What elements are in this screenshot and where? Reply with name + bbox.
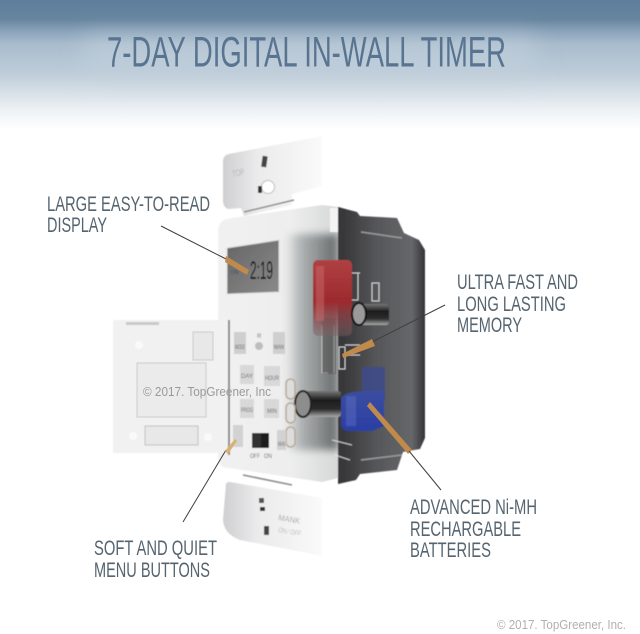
lower mounting plate: ON ⁄ OFF xyxy=(278,527,302,538)
label: menu buttons xyxy=(94,537,217,582)
label: display: DISPLAY xyxy=(47,214,107,237)
control buttons: PROG xyxy=(241,408,253,414)
label: memory: LONG LASTING xyxy=(457,293,566,316)
control buttons: DAY xyxy=(241,374,253,380)
control buttons: MODE xyxy=(235,345,245,351)
LCD display: ON xyxy=(231,270,239,276)
top mounting plate xyxy=(223,136,322,216)
label: menu buttons: MENU BUTTONS xyxy=(94,559,210,582)
top edge highlight xyxy=(330,208,338,232)
control buttons: HOUR xyxy=(265,376,280,382)
control buttons: MAN xyxy=(278,442,285,448)
label: display: LARGE EASY-TO-READ xyxy=(47,193,210,216)
control buttons xyxy=(233,332,286,450)
top mounting plate: TOP xyxy=(231,167,245,179)
callout arrow: memory xyxy=(342,305,445,358)
LCD display: 2:19 xyxy=(250,257,273,285)
body right edge mask xyxy=(338,207,345,484)
label: batteries: BATTERIES xyxy=(410,539,491,562)
label: display xyxy=(47,193,210,237)
housing highlights xyxy=(361,232,402,460)
label: memory: MEMORY xyxy=(457,314,522,337)
label: menu buttons: SOFT AND QUIET xyxy=(94,537,217,560)
callout arrow: batteries xyxy=(367,402,441,490)
circuit board strip xyxy=(322,318,336,374)
header gradient band xyxy=(0,0,640,130)
copyright: © 2017. TopGreener, Inc. xyxy=(497,618,626,632)
translucent switch body xyxy=(218,205,338,482)
slide switch xyxy=(250,433,272,460)
control buttons: MAN xyxy=(274,345,284,351)
upper black cylinder xyxy=(352,303,389,325)
watermark on device: © 2017. TopGreener, Inc xyxy=(143,385,271,399)
label: memory xyxy=(457,271,578,337)
control buttons: MIN xyxy=(267,409,277,415)
callout arrow: display xyxy=(161,226,249,275)
label: batteries xyxy=(410,496,537,562)
LCD display xyxy=(227,240,279,294)
label: batteries: ADVANCED Ni-MH xyxy=(410,496,537,519)
slide switch: OFF xyxy=(250,453,260,460)
lower mounting plate xyxy=(223,475,322,556)
side ovals xyxy=(286,379,295,447)
lower black cylinder xyxy=(295,391,341,417)
slide switch: ON xyxy=(264,453,272,460)
callout arrow: menu buttons xyxy=(183,439,237,522)
inner shading of body xyxy=(284,234,338,450)
open front cover xyxy=(113,320,230,455)
label: memory: ULTRA FAST AND xyxy=(457,271,578,294)
control buttons: R xyxy=(257,334,262,340)
back housing xyxy=(338,207,425,484)
red capacitor xyxy=(313,260,352,336)
label: batteries: RECHARGABLE xyxy=(410,518,521,541)
lower mounting plate: MANK xyxy=(278,513,301,526)
timer device xyxy=(113,136,425,556)
circuit traces xyxy=(322,273,379,460)
blue battery xyxy=(341,367,385,431)
